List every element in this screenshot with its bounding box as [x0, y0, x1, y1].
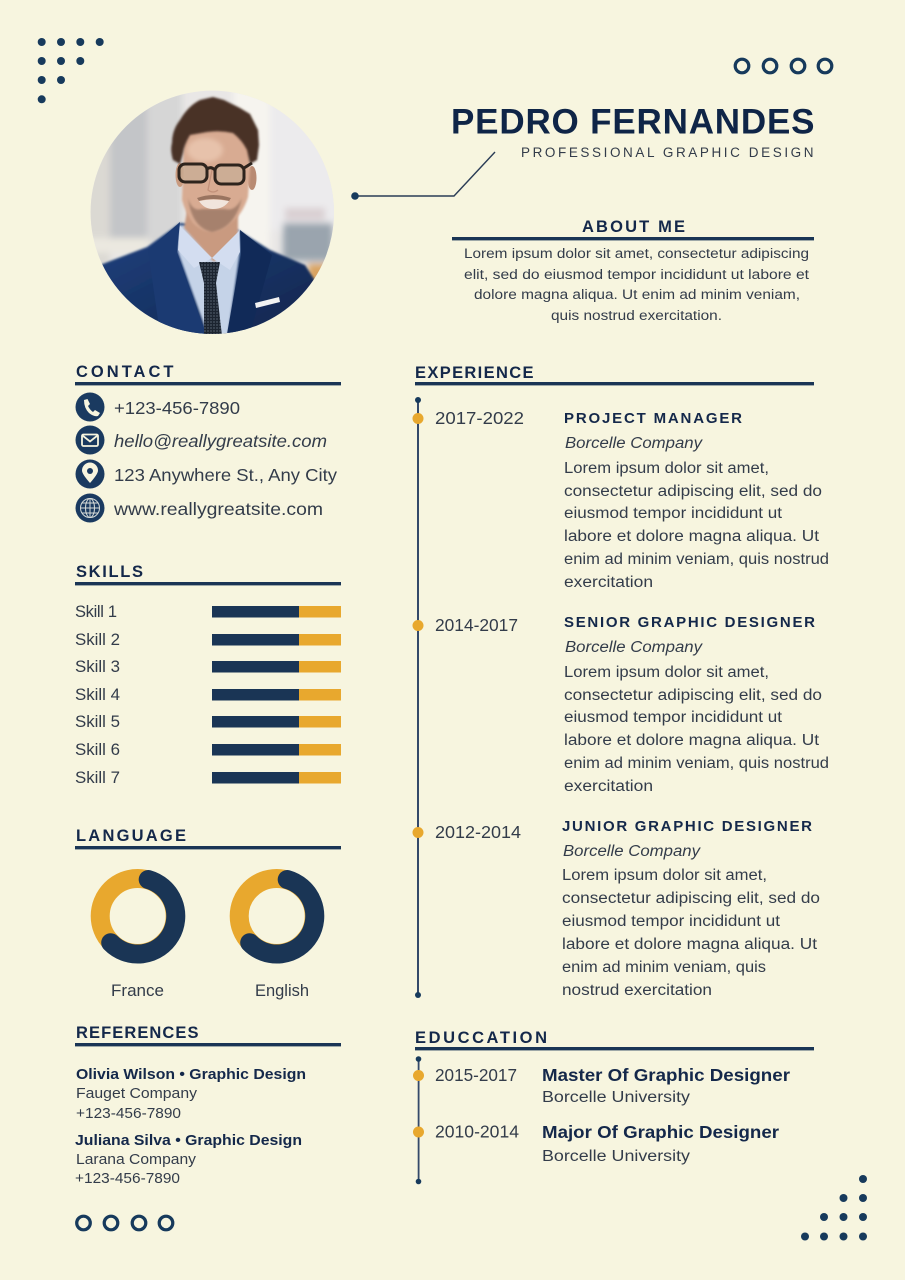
panel: contact: CONTACT [76, 363, 174, 381]
education: master: Master Of Graphic Designer [542, 1065, 790, 1085]
education timeline [413, 1056, 424, 1184]
panel: contact: www.reallygreatsite.com [113, 499, 323, 519]
job: project manager: exercitation [564, 574, 653, 591]
panel: about me: quis nostrud exercitation. [551, 308, 722, 323]
panel: contact: 123 Anywhere St., Any City [114, 465, 337, 485]
jacket edge [154, 222, 206, 334]
panel: references: REFERENCES [76, 1024, 198, 1042]
job: senior graphic designer [435, 614, 829, 795]
panel: about me: dolore magna aliqua. Ut enim ad minim veniam, [474, 287, 800, 302]
panel: language: France [111, 982, 164, 1000]
connector line [351, 152, 495, 200]
decoration: bottom-left rings [77, 1216, 173, 1230]
job: junior graphic designer: nostrud exercitation [562, 982, 712, 999]
education: master [435, 1065, 790, 1106]
skill rows [75, 603, 341, 787]
beard shadow [188, 198, 242, 232]
panel: skills [75, 563, 341, 787]
job: project manager: enim ad minim veniam, quis nostrud [564, 551, 829, 568]
subtitle: PROFESSIONAL GRAPHIC DESIGN [521, 145, 814, 160]
job: project manager: labore et dolore magna aliqua. Ut [564, 528, 820, 545]
education: major [435, 1122, 779, 1165]
panel: references [75, 1024, 341, 1187]
job: senior graphic designer: enim ad minim veniam, quis nostrud [564, 755, 829, 772]
job: project manager: 2017-2022 [435, 408, 524, 428]
panel: language: LANGUAGE [76, 827, 186, 845]
heading: education: EDUCCATION [415, 1029, 547, 1047]
panel: references: Larana Company [76, 1152, 197, 1168]
panel: about me: elit, sed do eiusmod tempor incididunt ut labore et [464, 267, 809, 282]
icon: mail [76, 426, 104, 454]
mouth [199, 200, 229, 209]
skill rows: Skill 5 [75, 713, 120, 731]
panel: about me [452, 218, 814, 323]
experience timeline [412, 397, 424, 998]
education: master: Borcelle University [542, 1089, 690, 1106]
job: senior graphic designer: exercitation [564, 778, 653, 795]
face [182, 128, 250, 232]
education: major: 2010-2014 [435, 1122, 519, 1142]
donut chart: France [100, 878, 176, 954]
job: junior graphic designer [435, 818, 820, 999]
panel: contact: +123-456-7890 [114, 398, 240, 418]
job: junior graphic designer: JUNIOR GRAPHIC DESIGNER [562, 818, 812, 835]
education: master: 2015-2017 [435, 1065, 517, 1085]
skill rows: Skill 4 [75, 686, 120, 704]
panel: about me: Lorem ipsum dolor sit amet, consectetur adipiscing [464, 246, 809, 261]
ears [176, 163, 184, 187]
education: major: Borcelle University [542, 1148, 690, 1165]
job: senior graphic designer: SENIOR GRAPHIC DESIGNER [564, 614, 815, 631]
job: project manager: Lorem ipsum dolor sit amet, [564, 460, 769, 477]
title: name: PEDRO FERNANDES [451, 102, 814, 142]
donut chart: English [239, 878, 315, 954]
job: junior graphic designer: Lorem ipsum dolor sit amet, [562, 867, 767, 884]
icon: phone [76, 392, 104, 422]
hair [171, 97, 259, 164]
skill rows: Skill 6 [75, 741, 120, 759]
glasses [179, 163, 252, 184]
job: senior graphic designer: 2014-2017 [435, 615, 518, 635]
job: senior graphic designer: eiusmod tempor incididunt ut [564, 709, 783, 726]
collar [178, 226, 212, 268]
panel: references: +123-456-7890 [75, 1171, 180, 1187]
decoration: top-left dot grid [38, 38, 104, 103]
panel: references: Olivia Wilson • Graphic Design [76, 1066, 306, 1083]
decoration: bottom-right dot grid [801, 1175, 867, 1240]
panel: contact: hello@reallygreatsite.com [114, 431, 327, 451]
decoration: top-right rings [735, 59, 832, 73]
job: junior graphic designer: Borcelle Company [563, 843, 701, 860]
job: senior graphic designer: Lorem ipsum dolor sit amet, [564, 664, 769, 681]
job: junior graphic designer: enim ad minim veniam, quis [562, 959, 766, 976]
job: project manager: eiusmod tempor incididunt ut [564, 505, 783, 522]
panel: contact [75, 363, 341, 522]
nose [208, 170, 218, 192]
skill rows: Skill 3 [75, 658, 120, 676]
profile photo [85, 85, 340, 340]
icon: location pin [76, 460, 104, 488]
job: senior graphic designer: labore et dolore magna aliqua. Ut [564, 732, 820, 749]
pocket square [255, 297, 280, 308]
job: senior graphic designer: Borcelle Company [565, 639, 703, 656]
tie [199, 262, 222, 336]
job: junior graphic designer: consectetur adipiscing elit, sed do [562, 890, 820, 907]
panel: references: Fauget Company [76, 1086, 198, 1102]
panel: about me: ABOUT ME [582, 218, 685, 236]
skill rows: Skill 1 [75, 603, 117, 621]
heading: experience: EXPERIENCE [415, 364, 534, 382]
job: project manager: Borcelle Company [565, 435, 703, 452]
panel: skills: SKILLS [76, 563, 143, 581]
panel: references: Juliana Silva • Graphic Design [75, 1132, 302, 1149]
heading: education [415, 1029, 814, 1050]
skill rows: Skill 7 [75, 769, 120, 787]
job: senior graphic designer: consectetur adipiscing elit, sed do [564, 687, 822, 704]
suit [102, 222, 315, 334]
shirt [178, 225, 240, 336]
job: junior graphic designer: 2012-2014 [435, 822, 521, 842]
panel: references: +123-456-7890 [76, 1106, 181, 1122]
job: project manager: consectetur adipiscing elit, sed do [564, 483, 822, 500]
heading: experience [415, 364, 814, 385]
job: junior graphic designer: eiusmod tempor incididunt ut [562, 913, 781, 930]
job: junior graphic designer: labore et dolore magna aliqua. Ut [562, 936, 818, 953]
neck [184, 205, 238, 262]
icon: globe [76, 494, 104, 522]
education: major: Major Of Graphic Designer [542, 1122, 779, 1142]
panel: language: English [255, 982, 309, 1000]
job: project manager: PROJECT MANAGER [564, 410, 742, 427]
skill rows: Skill 2 [75, 631, 120, 649]
panel: language [75, 827, 341, 1000]
job: project manager [435, 408, 829, 591]
